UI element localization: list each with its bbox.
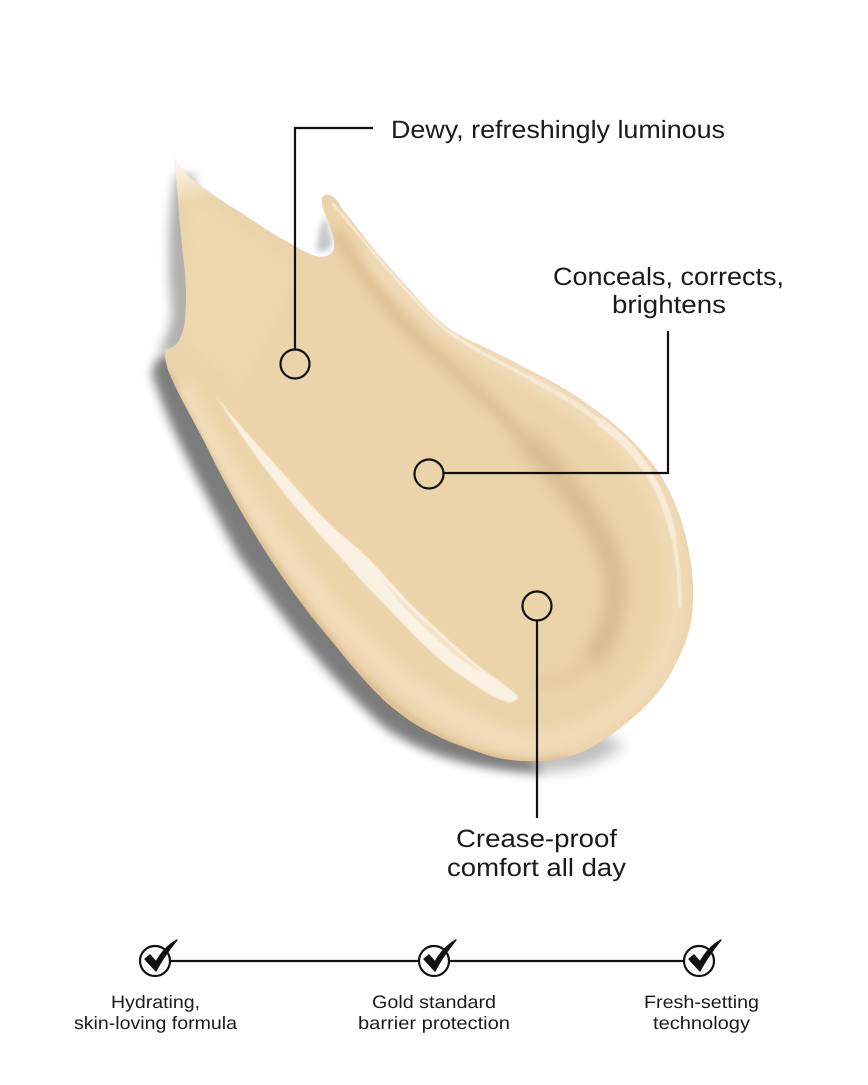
callout: crease-proof bbox=[447, 592, 627, 882]
benefit text 2: barrier protection bbox=[358, 1013, 510, 1033]
callout text: comfort all day bbox=[447, 854, 627, 882]
callout text: Crease-proof bbox=[456, 825, 617, 853]
highlight: upper right streak bbox=[333, 204, 680, 606]
benefit text 2: Gold standard bbox=[372, 992, 496, 1012]
benefits timeline bbox=[74, 940, 764, 1033]
benefit text 3: technology bbox=[653, 1013, 750, 1033]
swatch shading bbox=[165, 155, 693, 761]
callout marker and leader bbox=[414, 331, 668, 488]
icon: check 1 bbox=[140, 940, 177, 976]
callout marker and leader bbox=[522, 592, 552, 818]
icon: check 3 bbox=[684, 940, 721, 976]
swatch body bbox=[165, 155, 693, 761]
foundation swatch bbox=[152, 155, 693, 772]
callout text: brightens bbox=[612, 291, 726, 319]
icon: check 2 bbox=[419, 940, 456, 976]
benefit text 1: Hydrating, bbox=[111, 992, 200, 1012]
callout marker and leader bbox=[280, 128, 373, 378]
benefit text 1: skin-loving formula bbox=[74, 1013, 238, 1033]
timeline line bbox=[170, 960, 684, 962]
highlight: lower left streak bbox=[214, 393, 518, 702]
callout text: Conceals, corrects, bbox=[553, 263, 784, 291]
callout text: Dewy, refreshingly luminous bbox=[391, 116, 725, 144]
callout: dewy bbox=[280, 116, 725, 378]
benefit text 3: Fresh-setting bbox=[644, 992, 759, 1012]
swatch drop shadow bbox=[152, 175, 625, 772]
callout: conceals bbox=[414, 263, 791, 488]
